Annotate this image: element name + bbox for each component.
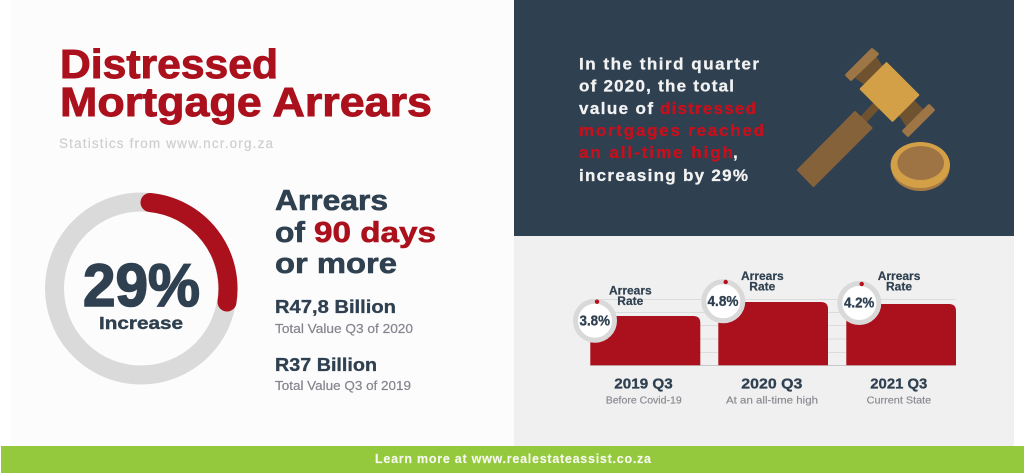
callout text: an all-time high [579,143,733,162]
bar: 2020 Q3 [704,269,828,407]
bar: 2019 Q3 [576,283,700,407]
bar: 2020 Q3: 4.8% [708,294,739,310]
footer banner: Learn more at www.realestateassist.co.za [375,452,652,466]
panel: arrears rate bar chart [514,236,1014,447]
panel: dark callout [514,0,1014,236]
source line: Statistics from www.ncr.org.za [59,136,273,151]
stat: 2020 value [275,297,413,336]
bar: 2021 Q3: 2021 Q3 [870,376,927,393]
stat: 2019 value: Total Value Q3 of 2019 [275,379,411,393]
title [60,41,432,125]
donut chart: 29% increase: 29% [83,252,200,319]
stat: 2020 value: Total Value Q3 of 2020 [275,322,413,336]
donut chart: 29% increase: Increase [99,313,183,333]
callout text: value of [579,99,653,118]
callout text [579,54,764,185]
bar: 2020 Q3: At an all-time high [726,395,818,407]
bar: 2021 Q3: Rate [886,280,912,294]
bar: 2019 Q3: 3.8% [580,314,610,330]
bar: 2021 Q3: 4.2% [844,296,874,312]
callout text: In the third quarter [579,54,759,74]
stat: 2019 value: R37 Billion [275,355,377,375]
callout text: of 2020, the total [579,76,734,96]
bar: 2020 Q3: Rate [749,280,776,294]
bar: 2019 Q3: 2019 Q3 [614,376,673,393]
callout text: , [733,143,738,162]
bar: 2019 Q3: Rate [617,294,644,308]
title: Distressed [60,41,278,87]
callout text: distressed [660,99,756,118]
heading: arrears of 90 days or more: 90 days [314,217,436,249]
bar: 2021 Q3 [840,269,956,407]
bar: 2020 Q3: Arrears [741,269,784,283]
title: Mortgage Arrears [60,79,432,125]
bar: 2021 Q3: Current State [867,395,931,407]
stat: 2019 value [275,355,411,393]
bar: 2019 Q3: Before Covid-19 [606,395,682,407]
icon: sound block [891,142,950,191]
heading: arrears of 90 days or more: Arrears [275,185,388,217]
bar: 2020 Q3: 2020 Q3 [741,376,802,393]
heading: arrears of 90 days or more [275,185,436,280]
bar: 2021 Q3: Arrears [878,269,921,283]
callout text: mortgages reached [579,121,764,140]
stat: 2020 value: R47,8 Billion [275,297,396,317]
heading: arrears of 90 days or more: of [275,217,305,249]
bar: 2019 Q3: Arrears [609,283,652,297]
panel: left statistics [10,0,514,447]
heading: arrears of 90 days or more: or more [275,248,397,280]
donut chart: 29% increase [54,202,228,375]
icon: gavel [798,50,933,186]
footer banner [1,446,1024,473]
callout text: increasing by 29% [579,166,748,185]
